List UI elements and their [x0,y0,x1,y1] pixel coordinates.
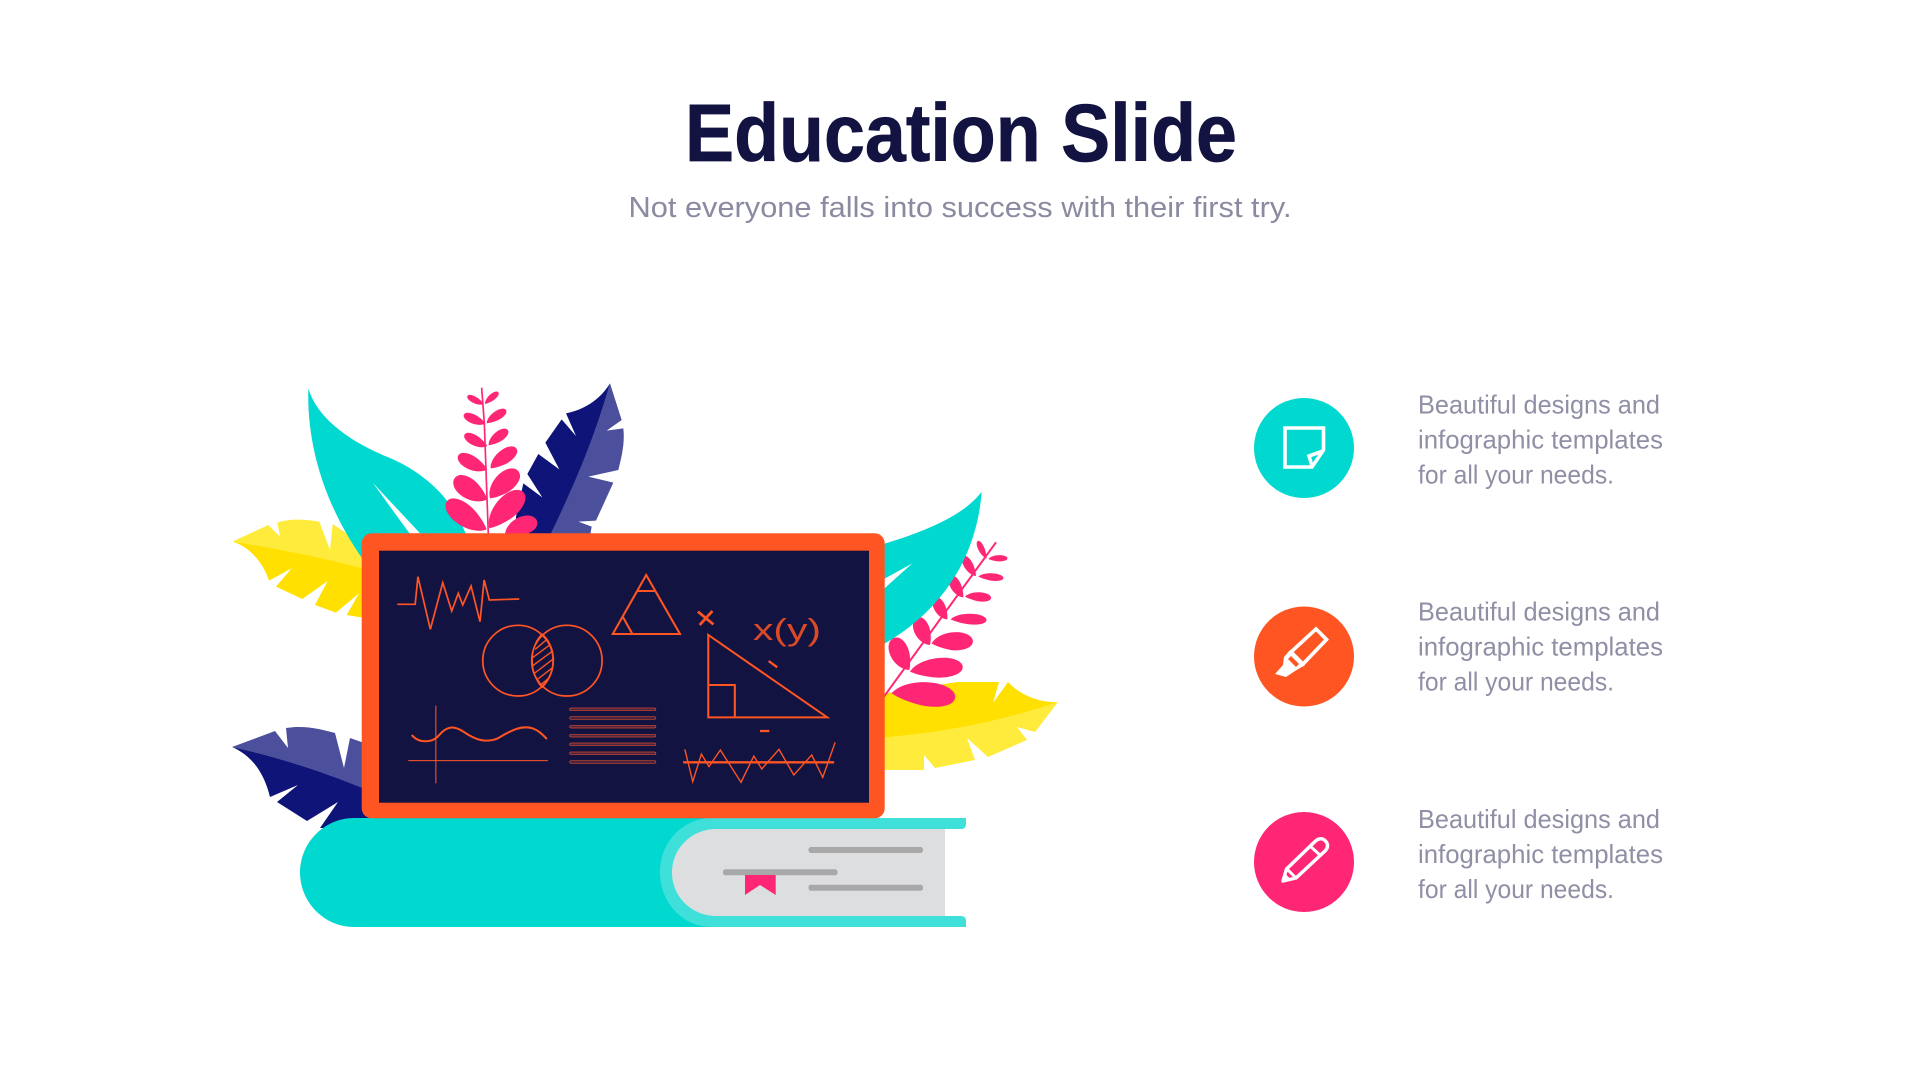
title: Education Slide [685,88,1237,179]
teal circle [1254,398,1354,498]
cross mark [698,611,713,625]
venn diagram [483,625,602,696]
chalkboard frame [362,533,885,818]
text block 3: infographic templates [1418,839,1663,869]
text block 1: Beautiful designs and [1418,390,1660,420]
pulse line [397,577,519,629]
navy feather top [516,383,624,537]
teal leaf left [308,388,467,560]
icon: highlighter [1275,629,1326,677]
item 3 [1254,804,1663,912]
icon: pencil [1282,839,1328,882]
pink plant top [440,388,540,541]
item 2 [1254,596,1663,706]
subtitle: Not everyone falls into success with their first try. [628,192,1292,224]
text block 1 [1418,390,1663,490]
pink branch right [877,540,1007,709]
page lines [723,847,923,891]
tick marks [760,661,777,731]
text block 3 [1418,804,1663,904]
pink circle [1254,812,1354,912]
zigzag line [683,742,835,782]
yellow leaf right [875,682,1058,770]
teal leaf right [880,492,982,646]
text block 3: Beautiful designs and [1418,804,1660,834]
chalkboard drawings [397,575,835,783]
stacked lines [570,708,656,763]
icon: sticky note [1285,428,1324,467]
text block 2 [1418,596,1663,696]
book inner cover [660,818,966,927]
orange circle [1254,606,1354,706]
text block 1: infographic templates [1418,424,1663,454]
item 1 [1254,390,1663,498]
text block 3: for all your needs. [1418,874,1614,904]
book [300,818,966,927]
bookmark [745,875,776,895]
illustration: education scene [232,383,1058,927]
right triangle [708,635,827,717]
chalkboard surface [379,551,869,803]
text block 2: Beautiful designs and [1418,596,1660,626]
book pages [672,829,945,916]
yellow leaf left [232,520,367,618]
navy leaf lower left [232,727,370,828]
book cover [300,818,760,927]
chalk formula: x(y) [753,612,821,647]
text block 1: for all your needs. [1418,460,1614,490]
text block 2: infographic templates [1418,632,1663,662]
triangle [613,575,680,634]
text block 2: for all your needs. [1418,666,1614,696]
wave graph [408,706,548,783]
